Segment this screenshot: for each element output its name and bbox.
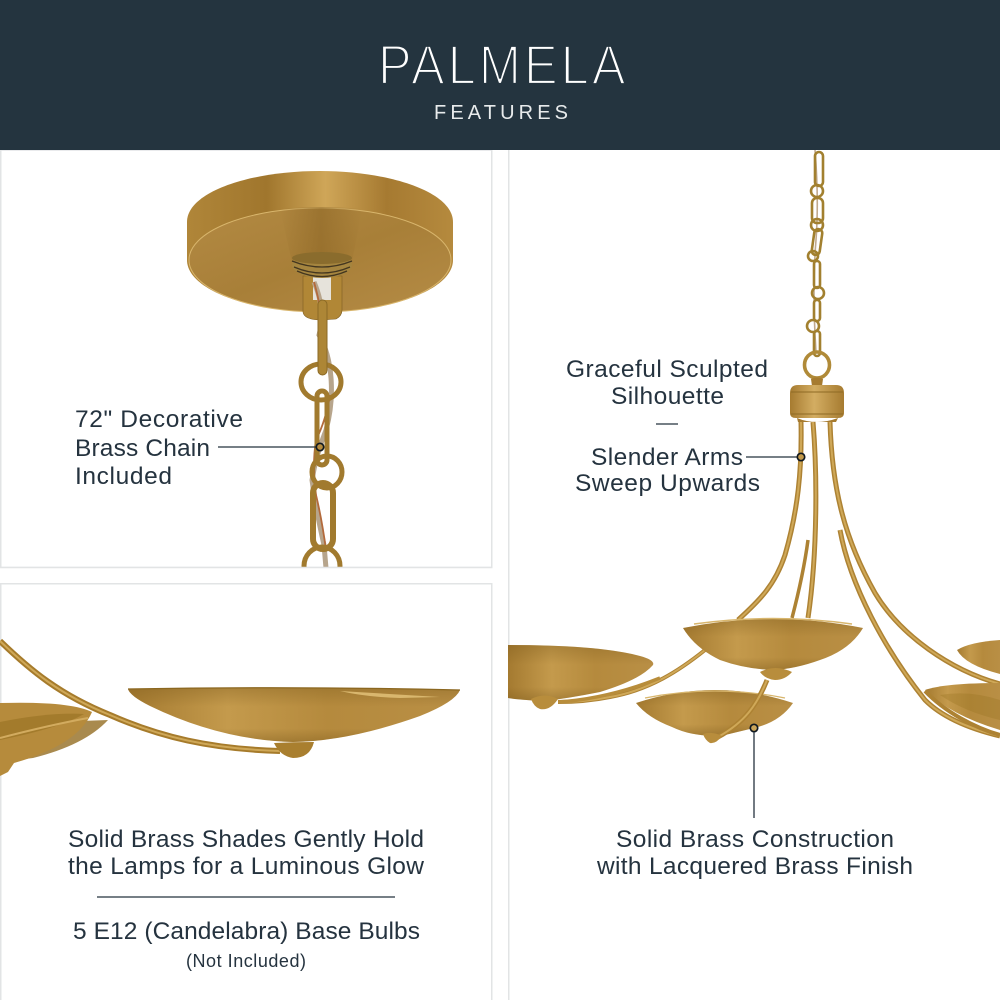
callout: brass construction: Solid Brass Construction — [616, 826, 894, 853]
icon: sweeping arms — [558, 422, 1000, 736]
callout: silhouette and arms: Slender Arms — [591, 444, 743, 471]
icon: right shades — [925, 640, 1000, 735]
panel: brass shades — [0, 584, 492, 1000]
icon: left shades — [0, 703, 108, 776]
callout: decorative brass chain: Brass Chain — [75, 435, 210, 462]
icon: lower shade — [636, 680, 793, 743]
text: shade description — [68, 826, 424, 971]
callout: decorative brass chain: Included — [75, 463, 172, 490]
callout: silhouette and arms — [566, 356, 805, 497]
callout: silhouette and arms: Sweep Upwards — [575, 470, 760, 497]
subtitle: FEATURES — [434, 102, 568, 124]
icon: ceiling canopy — [187, 171, 453, 320]
text: shade description: Solid Brass Shades Gently Hold — [68, 826, 424, 853]
icon: hanging chain — [804, 150, 830, 378]
callout: brass construction — [596, 724, 913, 880]
callout: silhouette and arms: Silhouette — [611, 383, 724, 410]
icon: decorative chain with twisted wire — [301, 282, 342, 585]
header band — [0, 0, 1000, 150]
callout: decorative brass chain — [75, 406, 324, 490]
icon: arm hub — [790, 378, 844, 422]
title: PALMELA — [378, 35, 626, 97]
text: shade description: the Lamps for a Luminous Glow — [68, 853, 424, 880]
panel: chain and canopy — [0, 150, 492, 585]
icon: large shade — [128, 688, 460, 758]
icon: centre shade — [683, 618, 863, 680]
icon: curved arm — [0, 641, 280, 751]
callout: silhouette and arms: Graceful Sculpted — [566, 356, 768, 383]
text: shade description: 5 E12 (Candelabra) Base Bulbs — [73, 918, 420, 945]
callout: brass construction: with Lacquered Brass Finish — [596, 853, 913, 880]
callout: decorative brass chain: 72" Decorative — [75, 406, 243, 433]
icon: left shade — [508, 645, 660, 709]
text: shade description: (Not Included) — [186, 951, 306, 971]
panel: chandelier — [508, 148, 1000, 1000]
